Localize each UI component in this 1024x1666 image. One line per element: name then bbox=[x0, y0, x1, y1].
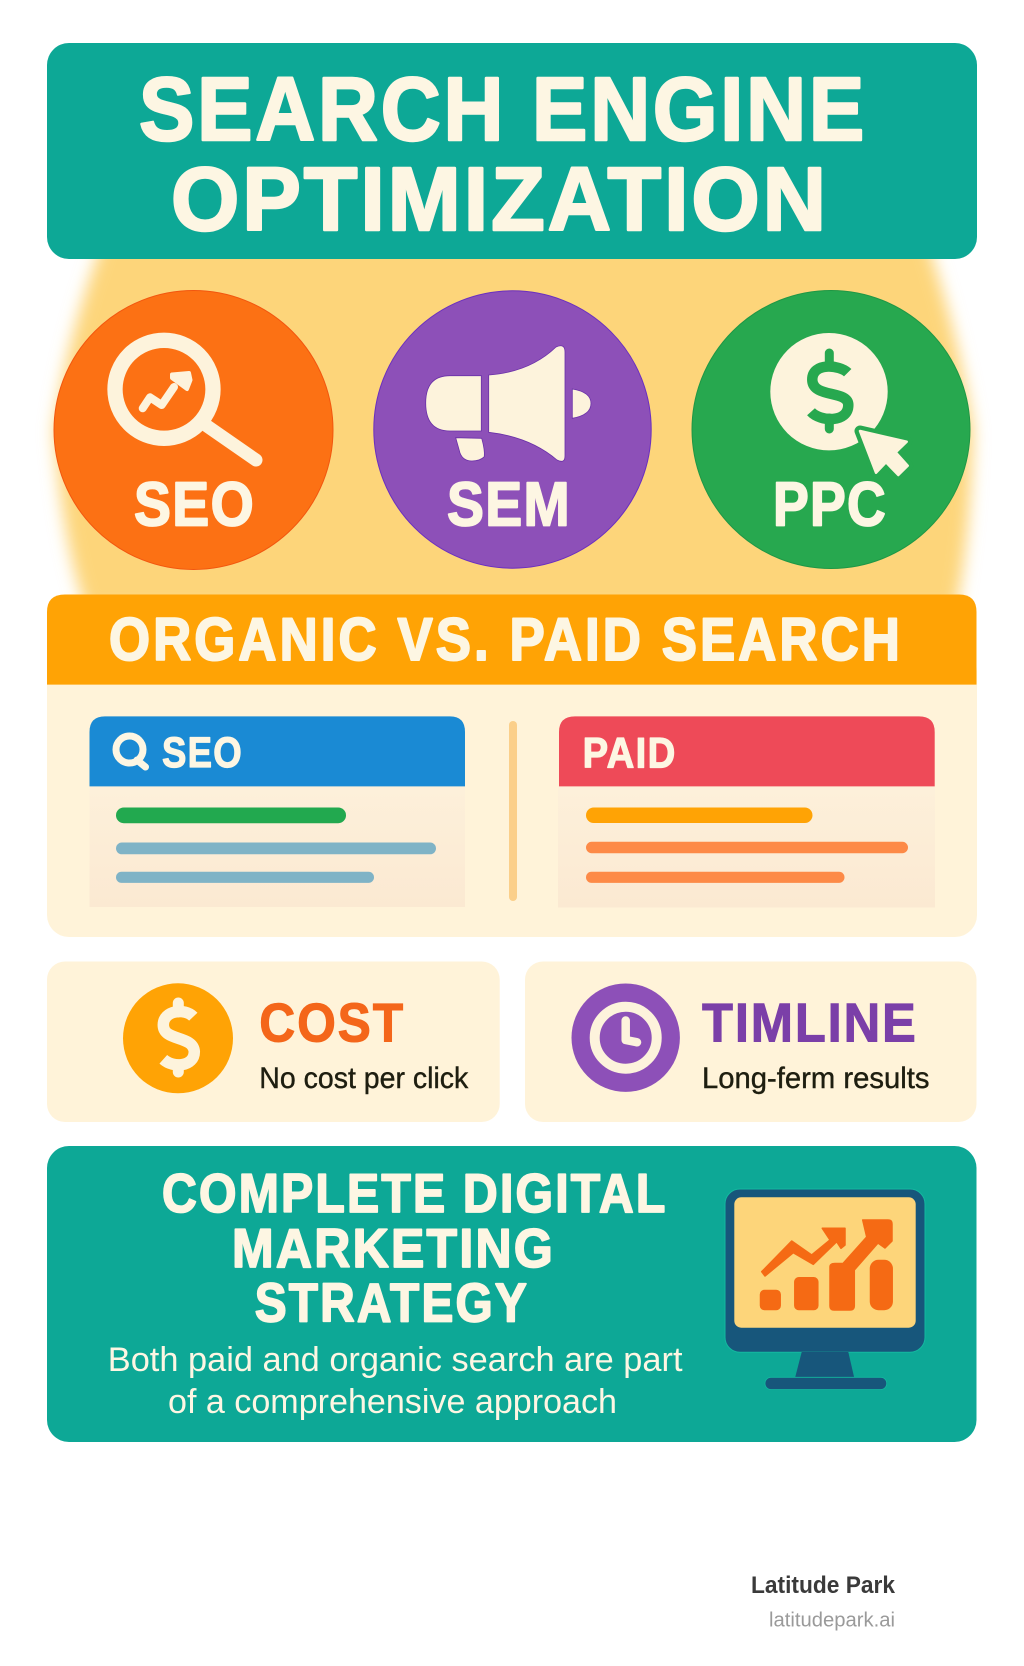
title text: OPTIMIZATION bbox=[171, 150, 829, 250]
icon: dollar coin bbox=[123, 983, 233, 1093]
result bars bbox=[116, 808, 436, 883]
footer: brand: latitudepark.ai bbox=[769, 1610, 895, 1632]
description text: Both paid and organic search are part bbox=[108, 1341, 683, 1379]
panel: organic vs paid search bbox=[47, 594, 977, 937]
heading: COMPLETE DIGITAL bbox=[162, 1162, 668, 1224]
heading: MARKETING bbox=[232, 1217, 555, 1279]
label: PAID: PAID bbox=[583, 730, 677, 778]
PPC badge bbox=[692, 290, 970, 568]
icon: dollar coin with cursor bbox=[770, 333, 908, 475]
card: SEO bbox=[90, 716, 465, 907]
icon: monitor with growth chart bbox=[725, 1189, 925, 1390]
heading bbox=[162, 1162, 668, 1333]
SEM badge bbox=[374, 291, 651, 568]
result bars bbox=[586, 808, 908, 883]
card: timeline bbox=[525, 962, 976, 1122]
title text: SEARCH ENGINE bbox=[139, 60, 867, 160]
divider bbox=[509, 721, 517, 901]
heading: organic vs paid search: ORGANIC VS. PAID SEARCH bbox=[109, 606, 903, 673]
title banner bbox=[47, 43, 977, 259]
text: long-term results: Long-ferm results bbox=[702, 1062, 930, 1095]
description text: of a comprehensive approach bbox=[168, 1383, 617, 1421]
text: no cost per click: No cost per click bbox=[259, 1062, 469, 1095]
icon: magnifying glass with trend arrow bbox=[115, 340, 256, 460]
footer: brand bbox=[751, 1572, 896, 1632]
heading: cost: COST bbox=[259, 992, 405, 1054]
heading: timeline: TIMLINE bbox=[702, 992, 918, 1054]
heading: STRATEGY bbox=[255, 1271, 529, 1333]
title text bbox=[139, 60, 867, 250]
icon: megaphone bbox=[426, 346, 591, 461]
background band: yellow glow bbox=[54, 235, 973, 610]
label: SEO: SEO bbox=[134, 470, 255, 540]
label: SEM: SEM bbox=[447, 470, 571, 540]
panel: complete digital marketing strategy bbox=[47, 1146, 976, 1442]
label: SEO: SEO bbox=[162, 729, 243, 777]
card: cost bbox=[47, 962, 500, 1122]
footer: brand: Latitude Park bbox=[751, 1572, 896, 1599]
panel body bbox=[47, 650, 977, 937]
icon: clock bbox=[572, 983, 680, 1092]
label: PPC: PPC bbox=[773, 470, 887, 540]
card: PAID bbox=[558, 716, 935, 908]
panel header bbox=[47, 594, 976, 685]
description text bbox=[108, 1341, 683, 1421]
SEO badge bbox=[54, 290, 333, 570]
icon: search bbox=[116, 736, 146, 767]
bar chart bbox=[760, 1220, 892, 1310]
